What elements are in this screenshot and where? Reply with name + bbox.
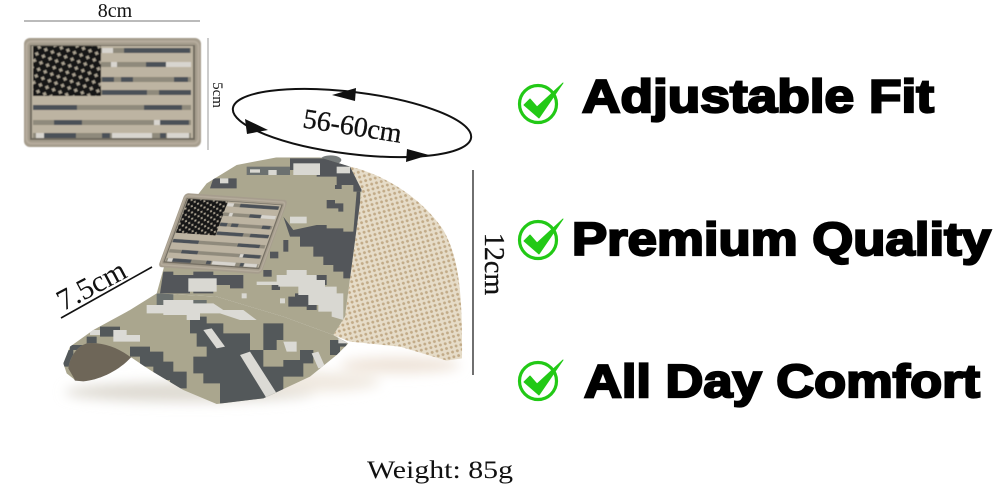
cap height dimension: 12cm — [478, 233, 509, 295]
head circumference ellipse — [229, 78, 475, 168]
heading: premium quality: Premium Quality — [572, 213, 991, 265]
camouflage crown — [156, 158, 362, 335]
cap button — [320, 155, 341, 165]
icon: check badge — [520, 83, 563, 122]
under-brim — [67, 341, 132, 381]
feature: premium quality — [520, 213, 991, 265]
mesh back panel — [333, 167, 462, 361]
camouflage visor — [63, 294, 348, 404]
feature: adjustable fit — [520, 70, 934, 122]
cap photo — [50, 150, 462, 407]
patch height dimension — [208, 38, 225, 150]
heading: adjustable fit: Adjustable Fit — [582, 70, 934, 122]
head circumference ellipse: 56-60cm — [301, 104, 404, 150]
ground shadow — [65, 357, 460, 402]
flag patch photo — [24, 38, 201, 147]
icon: check badge — [520, 219, 563, 258]
patch width dimension: 8cm — [98, 0, 133, 22]
patch height dimension: 5cm — [209, 82, 225, 108]
flag patch on cap — [158, 193, 288, 274]
heading: all day comfort: All Day Comfort — [584, 355, 980, 407]
feature: all day comfort — [520, 355, 980, 407]
icon: check badge — [520, 360, 563, 400]
visor length dimension: 7.5cm — [51, 254, 132, 318]
weight label: Weight: 85g — [367, 455, 513, 484]
